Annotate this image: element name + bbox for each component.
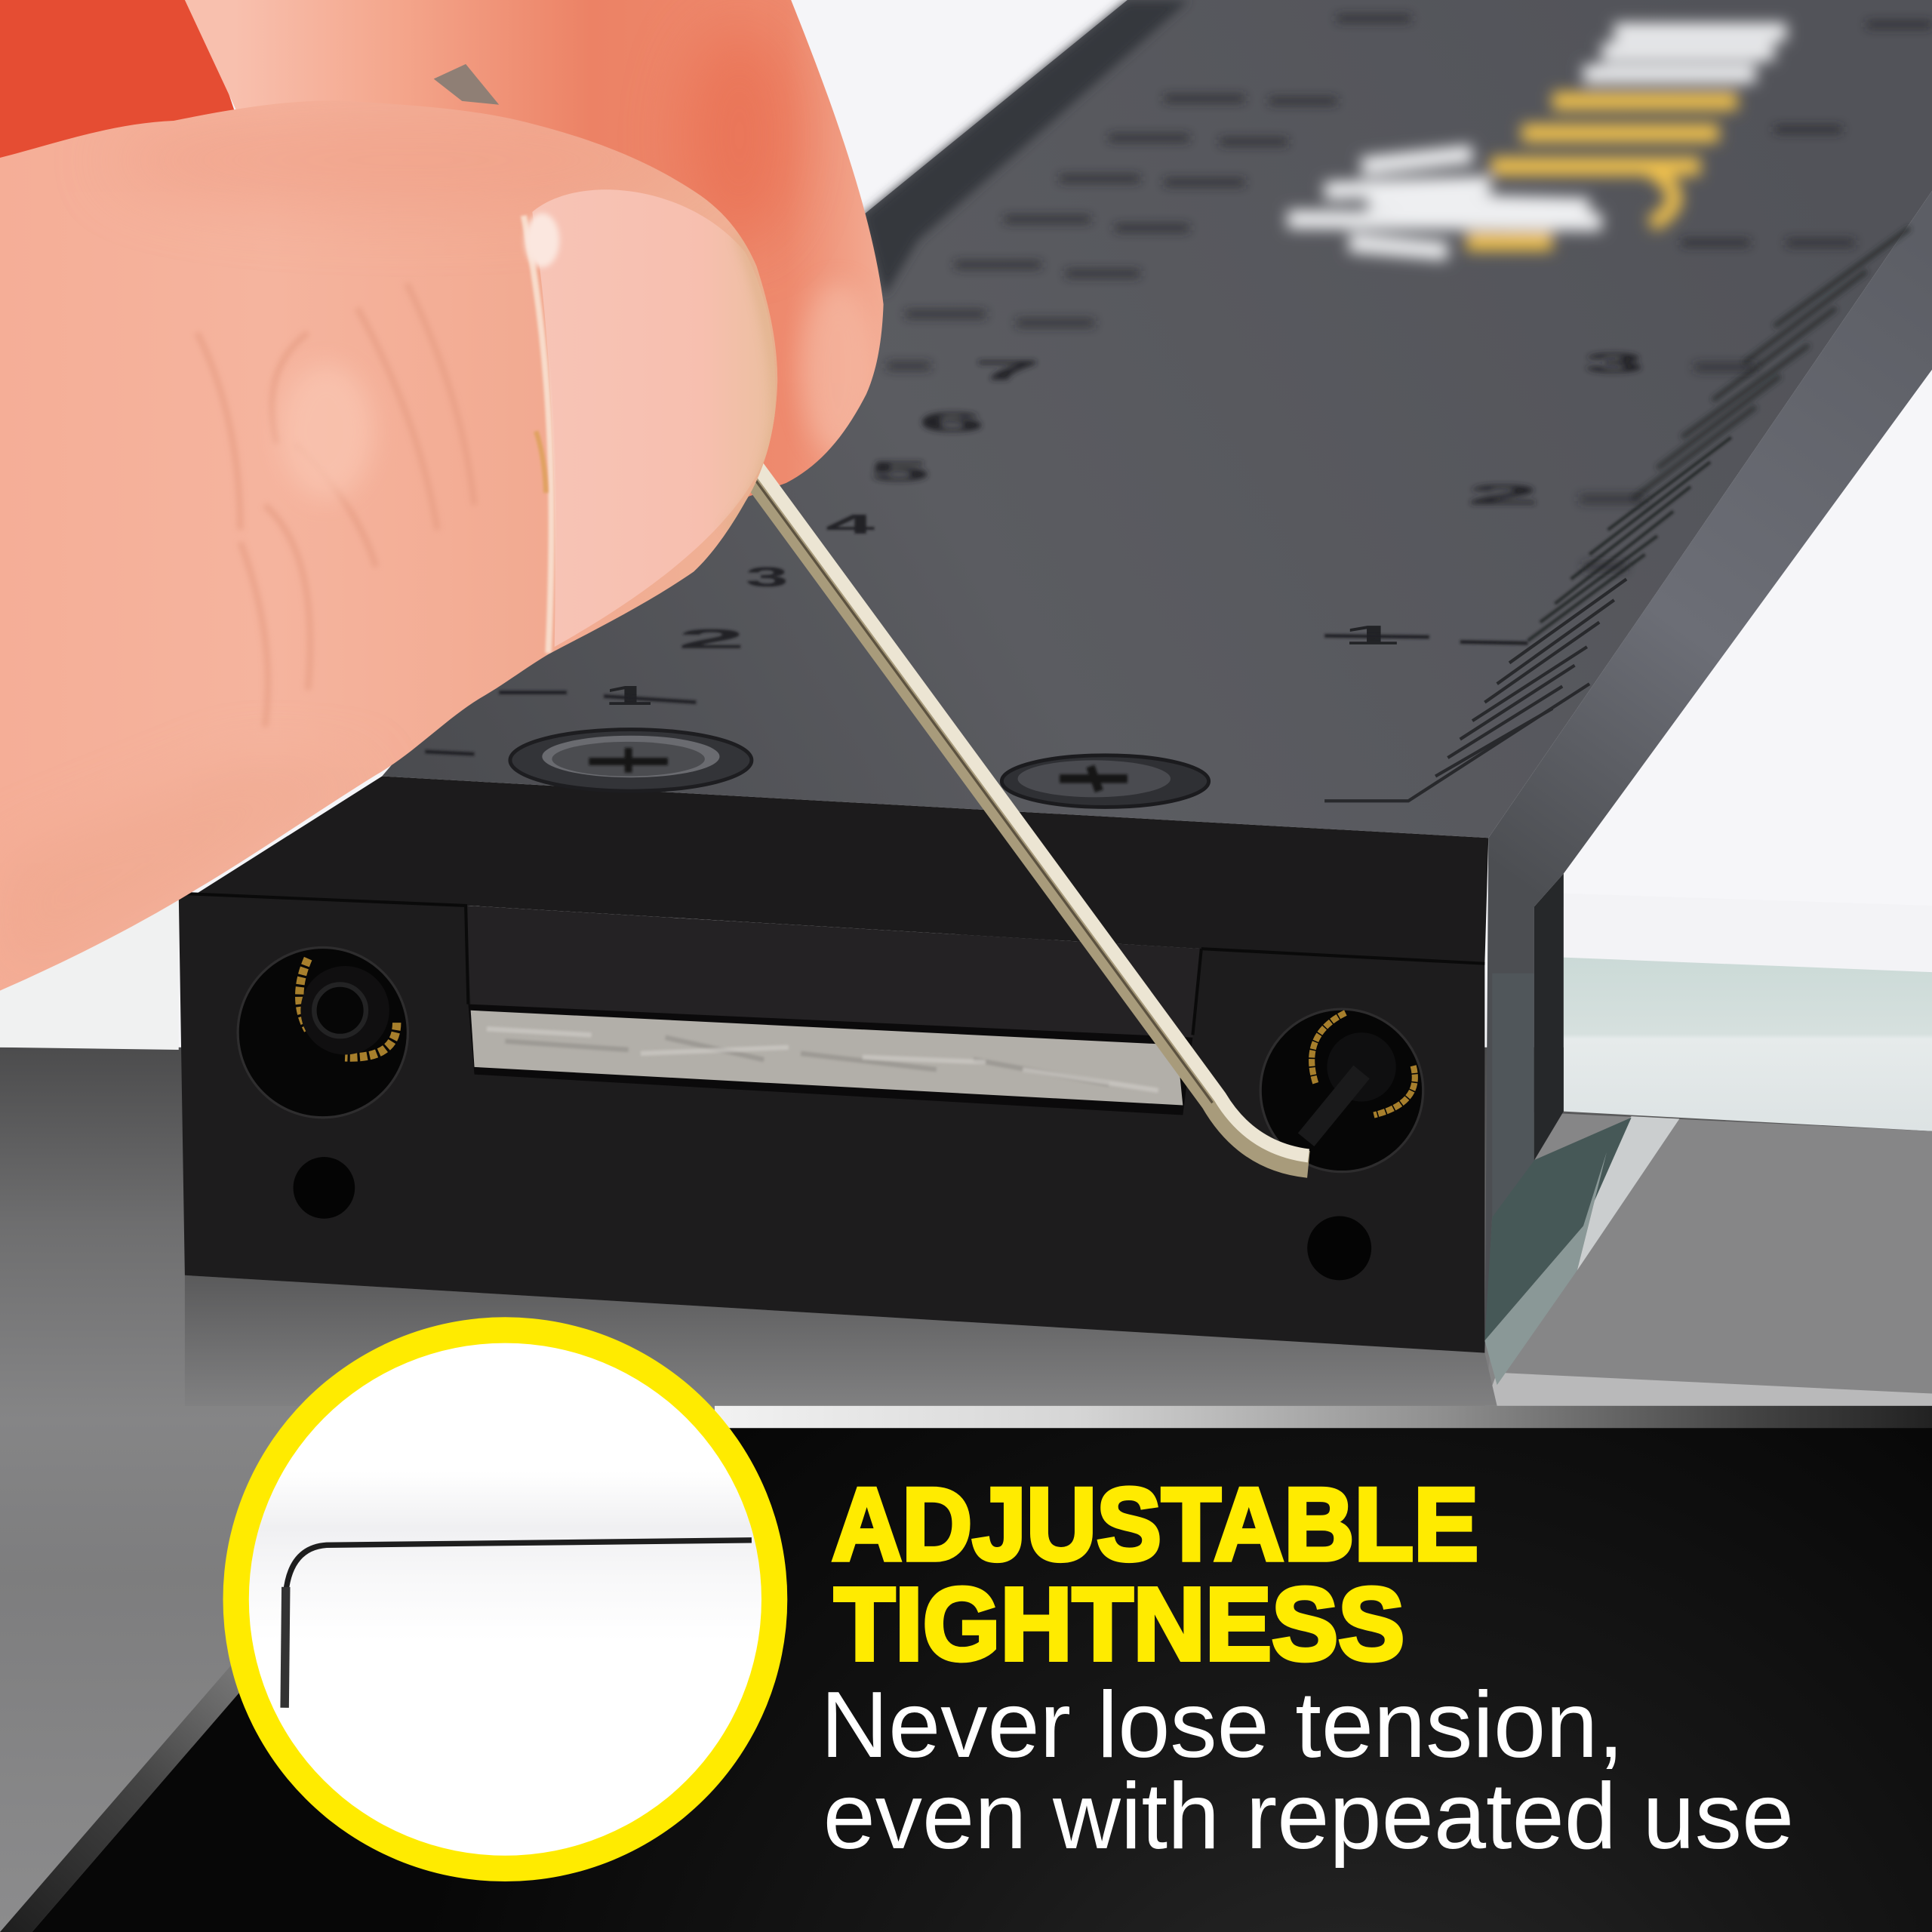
left pin hole <box>294 1157 355 1219</box>
thumbnail <box>532 189 776 647</box>
ruler top surface <box>382 0 1932 838</box>
headline: ADJUSTABLE <box>832 1467 1478 1583</box>
ruler markings: inch numbers and lines: 7 <box>974 355 1041 386</box>
ruler front top face <box>197 777 1488 964</box>
brand logo on ruler <box>1287 32 1786 251</box>
subtext: Never lose tension, <box>820 1673 1624 1777</box>
inset circle: hex key <box>223 1317 787 1881</box>
ruler reflection on floor <box>185 1275 1497 1406</box>
screw: left <box>510 730 752 791</box>
subtext: even with repeated use <box>823 1764 1794 1869</box>
ruler markings: near edge ticks <box>1324 228 1910 801</box>
ruler markings: inch numbers and lines: 5 <box>869 456 931 487</box>
ruler markings: inch numbers and lines <box>425 18 1932 754</box>
ruler markings: inch numbers and lines: 3 <box>746 561 789 592</box>
headline: TIGHTNESS <box>834 1567 1404 1682</box>
ruler front body <box>179 894 1484 1353</box>
dark caption panel <box>0 1406 1932 1932</box>
hex key <box>750 467 1309 1164</box>
ruler markings: inch numbers and lines: 2 <box>1466 479 1540 510</box>
thumb skin creases <box>197 284 475 727</box>
screw: right <box>1001 755 1209 807</box>
ruler markings: inch numbers and lines: 1 <box>604 680 653 711</box>
ruler far edge <box>863 0 1189 296</box>
sharpening blade <box>471 1011 1183 1105</box>
ruler markings: inch numbers and lines: 6 <box>918 406 986 437</box>
left adjustment hole <box>238 948 408 1118</box>
ruler markings: inch numbers and lines: 3 <box>1583 347 1645 378</box>
ruler markings: inch numbers and lines: 2 <box>678 623 746 654</box>
hex key tip behind finger <box>434 64 499 105</box>
right adjustment hole <box>1260 1009 1423 1172</box>
ruler side face <box>1484 191 1932 1353</box>
index finger <box>0 0 884 518</box>
thumb <box>0 100 777 991</box>
subtext <box>820 1673 1794 1869</box>
right pin hole <box>1307 1216 1371 1280</box>
ruler end clamp <box>1484 874 1632 1385</box>
headline <box>832 1467 1478 1682</box>
ruler markings: inch numbers and lines: 1 <box>1343 620 1400 651</box>
ruler markings: inch numbers and lines: 4 <box>826 509 875 540</box>
